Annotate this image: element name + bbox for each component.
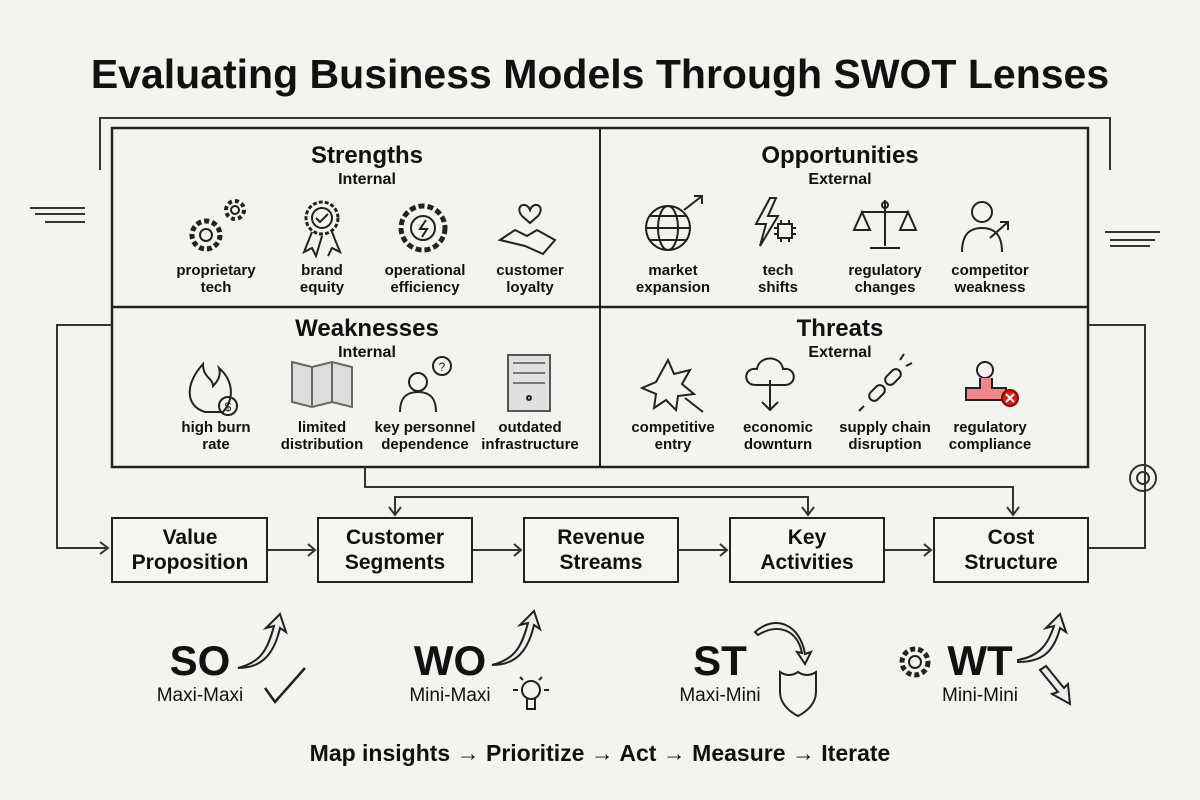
strategy: WO: WO [414, 637, 486, 684]
quadrant: weaknesses: rate [202, 436, 230, 453]
icons opportunities [646, 196, 1008, 252]
decorative frame lines [30, 118, 1160, 246]
icons weaknesses: $ [225, 400, 232, 414]
box: customer segments: Segments [345, 551, 445, 574]
quadrant: strengths: proprietary [176, 262, 256, 279]
quadrant: weaknesses [181, 315, 579, 453]
quadrant: threats: compliance [949, 436, 1031, 453]
strategy: WT: WT [947, 637, 1013, 684]
box: key activities [730, 518, 884, 582]
strategy: SO [157, 614, 305, 706]
box: cost structure: Structure [964, 551, 1058, 574]
quadrant: threats: downturn [744, 436, 812, 453]
box: revenue streams: Revenue [557, 526, 645, 549]
title: Evaluating Business Models Through SWOT Lenses [91, 51, 1109, 97]
quadrant: opportunities [636, 142, 1029, 296]
quadrant: strengths: loyalty [506, 279, 554, 296]
quadrant: weaknesses: outdated [498, 419, 562, 436]
quadrant: strengths: operational [385, 262, 465, 279]
quadrant: threats: supply chain [839, 419, 931, 436]
box: cost structure [934, 518, 1088, 582]
connectors [57, 325, 1145, 556]
quadrant: strengths: Strengths [311, 142, 423, 169]
footer process: Map insights → Prioritize → Act → Measure → Iterate [310, 740, 890, 766]
box: value proposition: Value [163, 526, 217, 549]
box: key activities: Activities [760, 551, 854, 574]
quadrant: threats: Threats [797, 315, 883, 342]
box: value proposition: Proposition [132, 551, 248, 574]
quadrant: strengths: Internal [338, 171, 396, 188]
icon: target [1130, 465, 1156, 491]
quadrant: threats: competitive [631, 419, 715, 436]
quadrant: strengths: tech [201, 279, 231, 296]
quadrant: weaknesses: Weaknesses [295, 315, 439, 342]
box: customer segments: Customer [346, 526, 444, 549]
quadrant: strengths: customer [496, 262, 564, 279]
quadrant: strengths: brand [301, 262, 343, 279]
quadrant: weaknesses: distribution [281, 436, 363, 453]
icons weaknesses [190, 355, 550, 415]
icons weaknesses: ? [439, 360, 446, 374]
box: value proposition [112, 518, 267, 582]
box: revenue streams: Streams [560, 551, 642, 574]
quadrant: threats: economic [743, 419, 813, 436]
quadrant: weaknesses: Internal [338, 344, 396, 361]
quadrant: strengths: efficiency [390, 279, 460, 296]
strategy: SO: Maxi-Maxi [157, 685, 243, 706]
strategy: SO: SO [170, 637, 230, 684]
box: revenue streams [524, 518, 678, 582]
quadrant: weaknesses: limited [298, 419, 346, 436]
quadrant: weaknesses: key personnel [375, 419, 475, 436]
quadrant: threats: External [808, 344, 872, 361]
strategy: WO [409, 611, 549, 709]
quadrant: threats [631, 315, 1031, 453]
quadrant: opportunities: shifts [758, 279, 798, 296]
strategy: WT: Mini-Mini [942, 685, 1018, 706]
icons threats [642, 354, 1018, 412]
quadrant: strengths [176, 142, 564, 296]
quadrant: opportunities: competitor [951, 262, 1029, 279]
quadrant: weaknesses: dependence [381, 436, 469, 453]
quadrant: weaknesses: high burn [181, 419, 251, 436]
box: cost structure: Cost [988, 526, 1034, 549]
box: key activities: Key [788, 526, 827, 549]
box: customer segments [318, 518, 472, 582]
flow boxes [112, 518, 1088, 582]
quadrant: opportunities: External [808, 171, 872, 188]
quadrant: opportunities: tech [763, 262, 793, 279]
quadrant: opportunities: market [648, 262, 698, 279]
strategy: ST: Maxi-Mini [679, 685, 761, 706]
quadrant: opportunities: regulatory [848, 262, 922, 279]
strategy: ST [679, 623, 816, 716]
quadrant: threats: regulatory [953, 419, 1027, 436]
quadrant: threats: disruption [848, 436, 922, 453]
quadrant: opportunities: expansion [636, 279, 710, 296]
panel: SWOT grid [112, 128, 1088, 467]
strategy: WT [902, 614, 1070, 706]
strategy: ST: ST [693, 637, 747, 684]
quadrant: strengths: equity [300, 279, 345, 296]
quadrant: opportunities: weakness [954, 279, 1025, 296]
quadrant: threats: entry [655, 436, 692, 453]
quadrant: opportunities: changes [855, 279, 915, 296]
strategy: WO: Mini-Maxi [409, 685, 491, 706]
strategies [157, 611, 1070, 716]
quadrant: opportunities: Opportunities [761, 142, 919, 169]
quadrant: weaknesses: infrastructure [481, 436, 579, 453]
icons strengths [192, 201, 555, 256]
